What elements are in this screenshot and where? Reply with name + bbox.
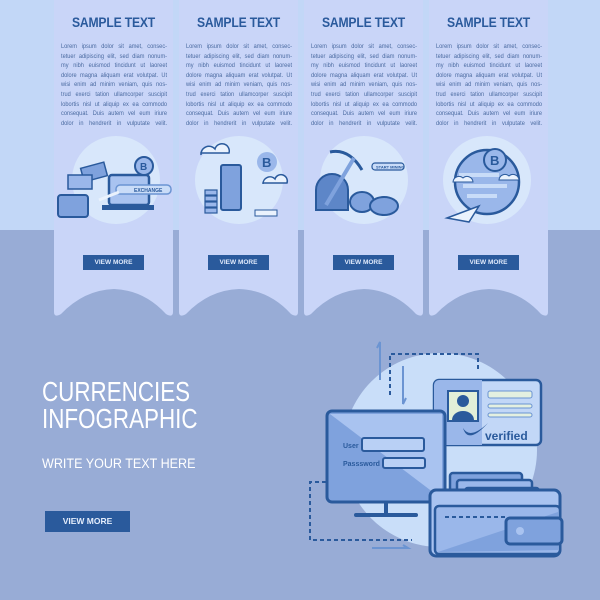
text block: consequat. Duis autem vel eum iriure	[61, 110, 167, 117]
text block	[186, 43, 292, 127]
button	[83, 255, 144, 270]
text block: consequat. Duis autem vel eum iriure	[436, 110, 542, 117]
text block: consequat. Duis autem vel eum iriure	[311, 110, 417, 117]
text block: Lorem ipsum dolor sit amet, consec-	[186, 43, 292, 50]
text block: dolor in hendrerit in vulputate velit.	[61, 120, 167, 127]
text block: my nibh euismod tincidunt ut laoreet	[186, 62, 292, 69]
panel: 1	[54, 15, 173, 316]
text block: consequat. Duis autem vel eum iriure	[186, 110, 292, 117]
text block: lobortis nisl ut aliquip ex ea commodo	[186, 101, 292, 108]
icon: exchange: EXCHANGE	[134, 188, 163, 194]
text block: wisi enim ad minim veniam, quis nos-	[61, 81, 167, 88]
heading: SAMPLE TEXT	[197, 15, 280, 30]
text block: Lorem ipsum dolor sit amet, consec-	[436, 43, 542, 50]
text block: my nibh euismod tincidunt ut laoreet	[436, 62, 542, 69]
text block: dolor in hendrerit in vulputate velit.	[311, 120, 417, 127]
text block: wisi enim ad minim veniam, quis nos-	[311, 81, 417, 88]
heading: SAMPLE TEXT	[72, 15, 155, 30]
text block: tetuer adipiscing elit, sed diam nonum-	[436, 53, 542, 60]
panel: 4	[429, 15, 548, 316]
subtitle: WRITE YOUR TEXT HERE	[42, 456, 195, 471]
button	[458, 255, 519, 270]
text block: trud exerci tation ullamcorper suscipit	[186, 91, 292, 98]
text block: dolor in hendrerit in vulputate velit.	[186, 120, 292, 127]
text block: trud exerci tation ullamcorper suscipit	[311, 91, 417, 98]
button: VIEW MORE	[470, 259, 507, 266]
text block	[311, 43, 417, 127]
monitor	[327, 411, 445, 517]
button: VIEW MORE	[220, 259, 257, 266]
text block: trud exerci tation ullamcorper suscipit	[436, 91, 542, 98]
text block: lobortis nisl ut aliquip ex ea commodo	[311, 101, 417, 108]
text block: tetuer adipiscing elit, sed diam nonum-	[61, 53, 167, 60]
text block: my nibh euismod tincidunt ut laoreet	[311, 62, 417, 69]
text block: dolore magna aliquam erat volutpat. Ut	[186, 72, 292, 79]
text block: dolore magna aliquam erat volutpat. Ut	[436, 72, 542, 79]
icon: exchange	[57, 136, 172, 224]
title: INFOGRAPHIC	[42, 403, 198, 434]
illustration: login & wallet	[309, 342, 564, 558]
icon: bitcoin server	[195, 136, 288, 224]
button	[333, 255, 394, 270]
text block: tetuer adipiscing elit, sed diam nonum-	[311, 53, 417, 60]
heading: SAMPLE TEXT	[447, 15, 530, 30]
monitor: User	[343, 443, 359, 450]
button: VIEW MORE	[95, 259, 132, 266]
button: VIEW MORE	[345, 259, 382, 266]
text block: Lorem ipsum dolor sit amet, consec-	[311, 43, 417, 50]
icon: globe	[443, 136, 531, 224]
text block	[436, 43, 542, 127]
heading: SAMPLE TEXT	[322, 15, 405, 30]
icon: mining	[315, 136, 408, 224]
text block: tetuer adipiscing elit, sed diam nonum-	[186, 53, 292, 60]
button: view more: VIEW MORE	[63, 516, 112, 526]
text block: lobortis nisl ut aliquip ex ea commodo	[436, 101, 542, 108]
title: CURRENCIES	[42, 376, 190, 407]
button: view more	[45, 511, 130, 532]
title	[42, 376, 198, 434]
text block: wisi enim ad minim veniam, quis nos-	[186, 81, 292, 88]
text block: my nibh euismod tincidunt ut laoreet	[61, 62, 167, 69]
text block: trud exerci tation ullamcorper suscipit	[61, 91, 167, 98]
text block: dolor in hendrerit in vulputate velit.	[436, 120, 542, 127]
icon: globe: B	[490, 153, 499, 168]
text block: dolore magna aliquam erat volutpat. Ut	[311, 72, 417, 79]
icon: bitcoin server: B	[262, 155, 271, 170]
text block: wisi enim ad minim veniam, quis nos-	[436, 81, 542, 88]
id card: verified	[485, 429, 528, 443]
panel: 2	[179, 15, 298, 316]
arrows and dashed lines	[310, 354, 478, 540]
icon: exchange: B	[140, 162, 147, 173]
text block: lobortis nisl ut aliquip ex ea commodo	[61, 101, 167, 108]
text block: dolore magna aliquam erat volutpat. Ut	[61, 72, 167, 79]
text block: Lorem ipsum dolor sit amet, consec-	[61, 43, 167, 50]
panel: 3	[304, 15, 423, 316]
button	[208, 255, 269, 270]
icon: mining: START MINING	[376, 164, 405, 170]
wallet	[430, 473, 562, 556]
id card	[434, 380, 541, 445]
text block	[61, 43, 167, 127]
monitor: Passsword	[343, 461, 380, 468]
